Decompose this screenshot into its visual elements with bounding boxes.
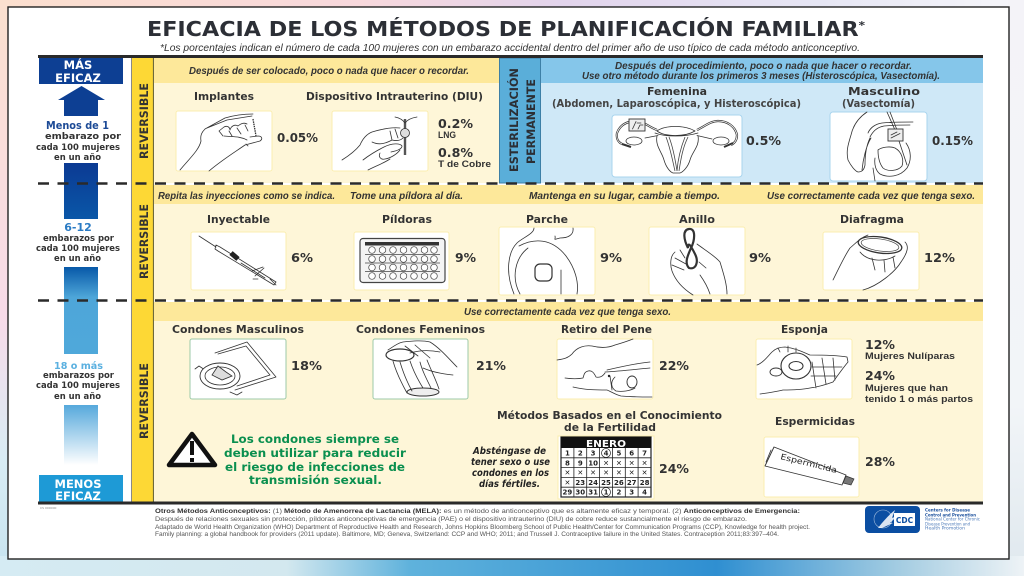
calendar <box>558 436 654 499</box>
icon: warning triangle <box>169 434 215 465</box>
tier: less than 1: embarazo por <box>45 132 122 142</box>
method: patch <box>499 213 622 295</box>
method: female sterilization: Femenina <box>647 85 707 98</box>
method: diaphragm: 12% <box>924 251 955 265</box>
method: female sterilization: 0.5% <box>746 134 781 148</box>
calendar: 26 <box>614 479 624 487</box>
tier: less than 1: en un año <box>54 153 101 163</box>
method: injectable: 6% <box>291 251 313 265</box>
logo: CDC: Centers for Disease <box>925 508 970 514</box>
tier: less than 1 <box>36 120 122 163</box>
footnote: other methods and sources <box>155 508 810 538</box>
calendar: ✕ <box>616 459 622 467</box>
calendar: 8 <box>565 459 570 467</box>
fertility note: tener sexo o use <box>471 457 550 468</box>
panel: effectiveness scale <box>36 57 123 503</box>
method: sponge: Mujeres que han <box>865 383 948 394</box>
fertility note: Absténgase de <box>472 446 547 457</box>
calendar: ✕ <box>629 459 635 467</box>
calendar: 27 <box>627 479 637 487</box>
bar: bottom tier <box>64 405 98 465</box>
footnote: other methods and sources: Family planning: a global handbook for providers (2011 update). Baltimore, MD; Geneva, Switzerland: CCP and WHO; 2011; and Trussell J. Contraceptive failure in the United States. Contraception 2011;83:397–404. <box>155 531 779 538</box>
logo: CDC: Control and Prevention <box>925 512 976 518</box>
method: IUD: Dispositivo Intrauterino (DIU) <box>306 90 483 103</box>
method: male condom <box>172 323 322 399</box>
method: female sterilization: (Abdomen, Laparoscópica, y Histeroscópica) <box>552 97 801 110</box>
method: sponge <box>756 323 973 405</box>
method: withdrawal: Retiro del Pene <box>561 323 652 336</box>
subtitle note: *Los porcentajes indican el número de cada 100 mujeres con un embarazo accidental dentro del primer año de uso típico de cada método anticonceptivo. <box>160 43 860 54</box>
method: spermicide: Espermicidas <box>775 415 855 428</box>
method: ring: 9% <box>749 251 771 265</box>
method: male condom: Condones Masculinos <box>172 323 304 336</box>
callout: condom warning: el riesgo de infecciones de <box>225 460 405 474</box>
tier: 18 or more <box>36 360 120 402</box>
calendar: ✕ <box>577 469 583 477</box>
stripe: reversible: REVERSIBLE <box>137 83 151 159</box>
callout: condom warning: Los condones siempre se <box>231 432 399 446</box>
callout: condom warning <box>224 432 406 487</box>
calendar: 6 <box>629 450 634 458</box>
calendar: 2 <box>578 450 583 458</box>
method: sponge: 12% <box>865 338 895 352</box>
calendar: 28 <box>640 479 650 487</box>
row 3 instruction: Use correctamente cada vez que tenga sexo. <box>464 306 671 318</box>
calendar: 1 <box>604 489 609 497</box>
row 2 instructions: Repita las inyecciones como se indica. <box>158 190 335 202</box>
logo: CDC: Health Promotion <box>925 526 965 532</box>
method: female condom: 21% <box>476 359 506 373</box>
tier: 18 or more: en un año <box>54 392 101 402</box>
method: vasectomy: Masculino <box>848 85 921 98</box>
calendar: ✕ <box>603 469 609 477</box>
method: vasectomy: (Vasectomía) <box>842 97 915 110</box>
calendar: 3 <box>629 489 634 497</box>
method: female condom <box>356 323 506 399</box>
panel: permanent sterilization <box>500 58 983 183</box>
tier: 6-12: 6-12 <box>64 221 92 234</box>
calendar: 4 <box>642 489 647 497</box>
method: pills: Píldoras <box>382 213 432 226</box>
calendar: ✕ <box>603 459 609 467</box>
calendar: ✕ <box>564 469 570 477</box>
method: sponge: Esponja <box>781 323 828 336</box>
row 2 instructions: Mantenga en su lugar, cambie a tiempo. <box>529 190 720 202</box>
tier: less than 1: Menos de 1 <box>46 120 109 132</box>
method: injectable: Inyectable <box>207 213 270 226</box>
calendar: ✕ <box>590 469 596 477</box>
title: EFICACIA DE LOS MÉTODOS DE PLANIFICACIÓN FAMILIAR <box>147 17 787 41</box>
method: fertility awareness: Métodos Basados en el Conocimiento <box>497 409 722 422</box>
logo: CDC <box>865 506 981 533</box>
method: ring: Anillo <box>679 213 715 226</box>
sterilization instruction <box>582 60 940 82</box>
more effective label: EFICAZ <box>55 71 101 85</box>
more effective label <box>39 57 123 85</box>
calendar: 2 <box>616 489 621 497</box>
method: spermicide <box>764 415 895 497</box>
method: IUD: 0.2% <box>438 117 473 131</box>
tier: 6-12: embarazos por <box>43 234 115 244</box>
fertility note <box>471 446 550 490</box>
tier: less than 1: cada 100 mujeres <box>36 143 120 153</box>
method: fertility awareness: 24% <box>659 462 689 476</box>
footnote: other methods and sources: Otros Métodos Anticonceptivos: (1) Método de Amenorrea de Lactancia (MELA): es un método de anticonceptivo que es altamente eficaz y temporal. (2) Anticonceptivos de Emergencia: <box>155 508 800 515</box>
stripe: reversible <box>132 57 154 503</box>
bar: middle tier <box>64 267 98 354</box>
row 2 instructions: Tome una píldora al día. <box>350 190 463 202</box>
calendar: ✕ <box>564 479 570 487</box>
stripe: reversible: REVERSIBLE <box>137 204 151 279</box>
document code: CS 000000 <box>40 506 56 510</box>
panel: row 1 reversible <box>154 58 500 183</box>
row 2 instructions <box>158 190 975 202</box>
tier: 18 or more: embarazos por <box>43 371 115 381</box>
calendar: 7 <box>642 450 647 458</box>
callout: condom warning: transmisión sexual. <box>249 473 382 487</box>
tier: 6-12: en un año <box>54 254 101 264</box>
method: pills <box>354 213 476 290</box>
calendar: ENERO <box>586 439 626 450</box>
method: sponge: Mujeres Nulíparas <box>865 351 955 362</box>
method: diaphragm <box>823 213 955 290</box>
sterilization column label <box>500 58 540 183</box>
tier: 18 or more: cada 100 mujeres <box>36 381 120 391</box>
fertility note: días fértiles. <box>479 479 540 490</box>
tier: 6-12 <box>36 221 120 264</box>
method: fertility awareness <box>471 409 722 499</box>
method: vasectomy: 0.15% <box>932 134 973 148</box>
method: implants: 0.05% <box>277 131 318 145</box>
method: diaphragm: Diafragma <box>840 213 904 226</box>
fertility note: condones en los <box>472 468 549 479</box>
bar: top tier <box>64 163 98 219</box>
sterilization column label: ESTERILIZACIÓN <box>506 68 521 172</box>
method: withdrawal <box>557 323 689 399</box>
calendar: ✕ <box>642 469 648 477</box>
method: IUD: 0.8% <box>438 146 473 160</box>
calendar: 5 <box>616 450 621 458</box>
calendar: ✕ <box>629 469 635 477</box>
method: IUD: T de Cobre <box>438 159 491 170</box>
callout: condom warning: deben utilizar para reducir <box>224 446 406 460</box>
less effective label: EFICAZ <box>55 489 101 503</box>
calendar: 9 <box>578 459 583 467</box>
logo: CDC: National Center for Chronic <box>925 516 981 522</box>
logo: CDC: Disease Prevention and <box>925 522 970 528</box>
less effective label: MENOS <box>55 477 101 491</box>
panel: row 2 reversible <box>154 185 983 300</box>
stripe: reversible: REVERSIBLE <box>137 363 151 439</box>
logo: CDC: CDC <box>896 516 914 525</box>
footnote: other methods and sources: Adaptado de World Health Organization (WHO) Department of Reproductive Health and Research, Johns Hopkins Bloomberg School of Public Health/Center for Communication Programs (CCP), Knowledge for health project. <box>155 524 810 531</box>
method: vasectomy <box>830 85 973 181</box>
method: female condom: Condones Femeninos <box>356 323 485 336</box>
method: sponge: tenido 1 o más partos <box>865 394 973 405</box>
row 1 instruction: Después de ser colocado, poco o nada que hacer o recordar. <box>189 65 469 77</box>
tier: 18 or more: 18 o más <box>54 360 103 372</box>
calendar: 3 <box>591 450 596 458</box>
calendar: ✕ <box>616 469 622 477</box>
footnote: other methods and sources: Después de relaciones sexuales sin protección, píldoras anticonceptivas de emergencia (PAE) o el dispositivo intrauterino (DIU) de cobre reduce sustancialmente el riesgo de embarazo. <box>155 516 747 523</box>
method: implants: Implantes <box>194 90 254 103</box>
method: IUD: LNG <box>438 130 456 141</box>
method: withdrawal: 22% <box>659 359 689 373</box>
method: injectable <box>191 213 313 290</box>
panel: row 3 reversible <box>154 302 983 502</box>
rule lines and dashed tier dividers <box>38 56 983 503</box>
title: * <box>859 19 865 32</box>
calendar: 10 <box>588 459 598 467</box>
method: ring <box>649 213 771 295</box>
calendar: 24 <box>588 479 598 487</box>
calendar: 31 <box>588 489 598 497</box>
method: male condom: 18% <box>291 359 322 373</box>
method: implants <box>176 90 318 171</box>
method: female sterilization <box>552 85 801 177</box>
calendar: ✕ <box>642 459 648 467</box>
calendar: 23 <box>575 479 585 487</box>
method: spermicide: Espermicida <box>780 452 838 475</box>
calendar: 30 <box>575 489 585 497</box>
sterilization instruction: Use otro método durante los primeros 3 meses (Histeroscópica, Vasectomía). <box>582 70 940 82</box>
arrow up <box>58 86 105 116</box>
method: IUD <box>306 90 491 171</box>
tier: 6-12: cada 100 mujeres <box>36 244 120 254</box>
calendar: 1 <box>565 450 570 458</box>
method: pills: 9% <box>455 251 476 265</box>
method: patch: Parche <box>526 213 568 226</box>
calendar: 25 <box>601 479 611 487</box>
sterilization instruction: Después del procedimiento, poco o nada que hacer o recordar. <box>615 60 912 72</box>
method: fertility awareness: de la Fertilidad <box>564 421 656 434</box>
more effective label: MÁS <box>64 57 92 72</box>
row 2 instructions: Use correctamente cada vez que tenga sexo. <box>767 190 975 202</box>
less effective label <box>39 475 123 503</box>
calendar: 29 <box>563 489 572 497</box>
method: sponge: 24% <box>865 369 895 383</box>
method: spermicide: 28% <box>865 455 895 469</box>
calendar: 4 <box>604 450 609 458</box>
sterilization column label: PERMANENTE <box>524 79 538 164</box>
method: patch: 9% <box>600 251 622 265</box>
